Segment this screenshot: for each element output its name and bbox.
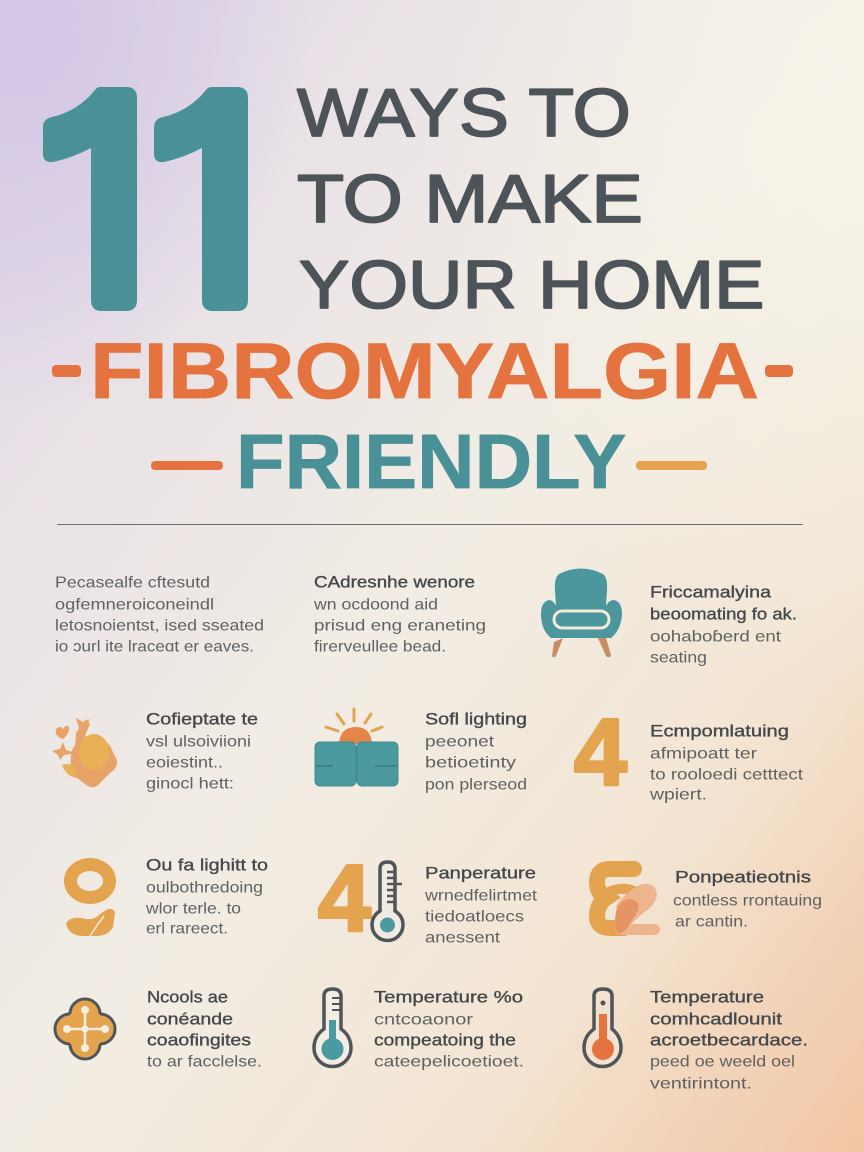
text block: row 1 column 1: io ɔurl ite lraceɑt er eaves. (55, 638, 254, 656)
text block: row 4 column 2: Temperature %o (374, 988, 523, 1006)
text block: row 4 column 3: acroetbecardace. (650, 1032, 808, 1050)
icon: orange thermometer (584, 989, 621, 1066)
icon: number 4 with thermometer (318, 846, 403, 952)
text block: row 2 column 2: pon plerseod (425, 776, 527, 794)
icon: orange body blob with hearts (52, 718, 117, 787)
icon: teal thermometer (314, 989, 351, 1066)
text block: row 4 column 1: to ar facclelse. (147, 1054, 262, 1070)
icon: number 4 with thermometer: 4 (318, 846, 371, 952)
text block: row 3 column 2: anessent (425, 930, 501, 946)
text block: row 2 column 3 (649, 722, 804, 804)
text block: row 4 column 2: compeatoing the (374, 1032, 516, 1050)
text block: row 1 column 1: ogfemneroiconeindl (55, 596, 214, 614)
text block: row 3 column 3: contless rrontauing (673, 892, 822, 910)
text block: row 1 column 3: Friccamalyina (650, 584, 772, 602)
text block: row 1 column 1 (55, 574, 264, 656)
text block: row 3 column 3: ar cantin. (675, 914, 748, 930)
icon: clover network (55, 999, 115, 1059)
text block: row 1 column 1: Pecasealfe cftesutd (55, 574, 210, 592)
text block: row 4 column 3: comhcadlounit (650, 1010, 783, 1028)
text block: row 1 column 3: oohaboɓerd ent (650, 628, 782, 646)
heading: friendly with dashes: FRIENDLY (236, 418, 626, 505)
text block: row 2 column 2: Sofl lighting (425, 710, 527, 728)
text block: row 3 column 3: Ponpeatieotnis (675, 868, 811, 886)
text block: row 3 column 2: Panperature (425, 864, 536, 882)
text block: row 1 column 2 (313, 574, 486, 656)
text block: row 1 column 2: prisud eng eraneting (314, 618, 486, 634)
text block: row 2 column 1 (146, 710, 258, 792)
text block: row 4 column 1: Ncools ae (147, 988, 228, 1006)
text block: row 2 column 3: afmipoatt ter (650, 746, 758, 762)
text block: row 3 column 2: wrnedfelirtmet (424, 888, 538, 904)
text block: row 2 column 3: to rooloedi cetttect (650, 766, 804, 784)
text block: row 2 column 1: vsl ulsoiviioni (146, 734, 251, 750)
text block: row 2 column 2: peeonet (425, 734, 495, 750)
text block: row 4 column 1: conéande (147, 1010, 233, 1028)
text block: row 2 column 3: Ecmpomlatuing (650, 722, 789, 740)
text block: row 1 column 3 (650, 584, 797, 666)
title: ways to make your home: WAYS TO (297, 75, 631, 151)
text block: row 3 column 2 (424, 864, 538, 946)
icon: number 4: 4 (574, 700, 627, 806)
text block: row 3 column 1 (145, 856, 268, 938)
icon: armchair (541, 568, 622, 658)
text block: row 3 column 2: tiedoatloecs (425, 908, 524, 926)
text block: row 3 column 1: wlor terle. to (145, 900, 241, 918)
text block: row 2 column 1: eoiestint.. (146, 754, 223, 772)
icon: ring and hand (66, 864, 115, 936)
icon: number 6 with peach limb (597, 869, 660, 935)
text block: row 4 column 1: coaofingites (147, 1032, 251, 1050)
text block: row 3 column 1: erl rareect. (146, 920, 228, 938)
text block: row 1 column 3: beoomating fo ak. (650, 606, 797, 624)
text block: row 2 column 1: ginocl hett: (146, 776, 234, 792)
text block: row 2 column 2: betioetinty (425, 754, 516, 772)
text block: row 1 column 2: CAdresnhe wenore (314, 574, 475, 592)
text block: row 3 column 3 (673, 868, 822, 930)
text block: row 4 column 3: peed oe weeld oel (650, 1054, 795, 1070)
text block: row 4 column 2 (374, 988, 524, 1070)
text block: row 4 column 1 (147, 988, 262, 1070)
text block: row 4 column 2: cntcoaonor (374, 1012, 474, 1028)
icon: sun over open book (315, 709, 398, 786)
title: ways to make your home: TO MAKE (297, 161, 643, 237)
text block: row 1 column 1: letosnoientst, ised sseated (55, 618, 264, 634)
text block: row 2 column 3: wpiert. (649, 786, 707, 804)
text block: row 4 column 3 (650, 988, 808, 1092)
title: ways to make your home: YOUR HOME (299, 247, 764, 323)
big number 11 (43, 87, 248, 311)
text block: row 2 column 2 (425, 710, 527, 794)
text block: row 4 column 3: ventirintont. (650, 1076, 752, 1092)
title: ways to make your home (297, 75, 764, 323)
text block: row 1 column 2: wn ocdoond aid (313, 596, 438, 614)
text block: row 2 column 1: Cofieptate te (146, 710, 258, 728)
text block: row 1 column 2: firerveullee bead. (314, 638, 446, 656)
text block: row 1 column 3: seating (650, 650, 707, 666)
text block: row 4 column 3: Temperature (650, 988, 764, 1006)
text block: row 4 column 2: cateepelicoetioet. (374, 1054, 524, 1070)
heading: fibromyalgia with dashes: FIBROMYALGIA (90, 326, 759, 415)
text block: row 3 column 1: Ou fa lighitt to (146, 856, 268, 874)
text block: row 3 column 1: oulbothredoing (146, 880, 263, 896)
